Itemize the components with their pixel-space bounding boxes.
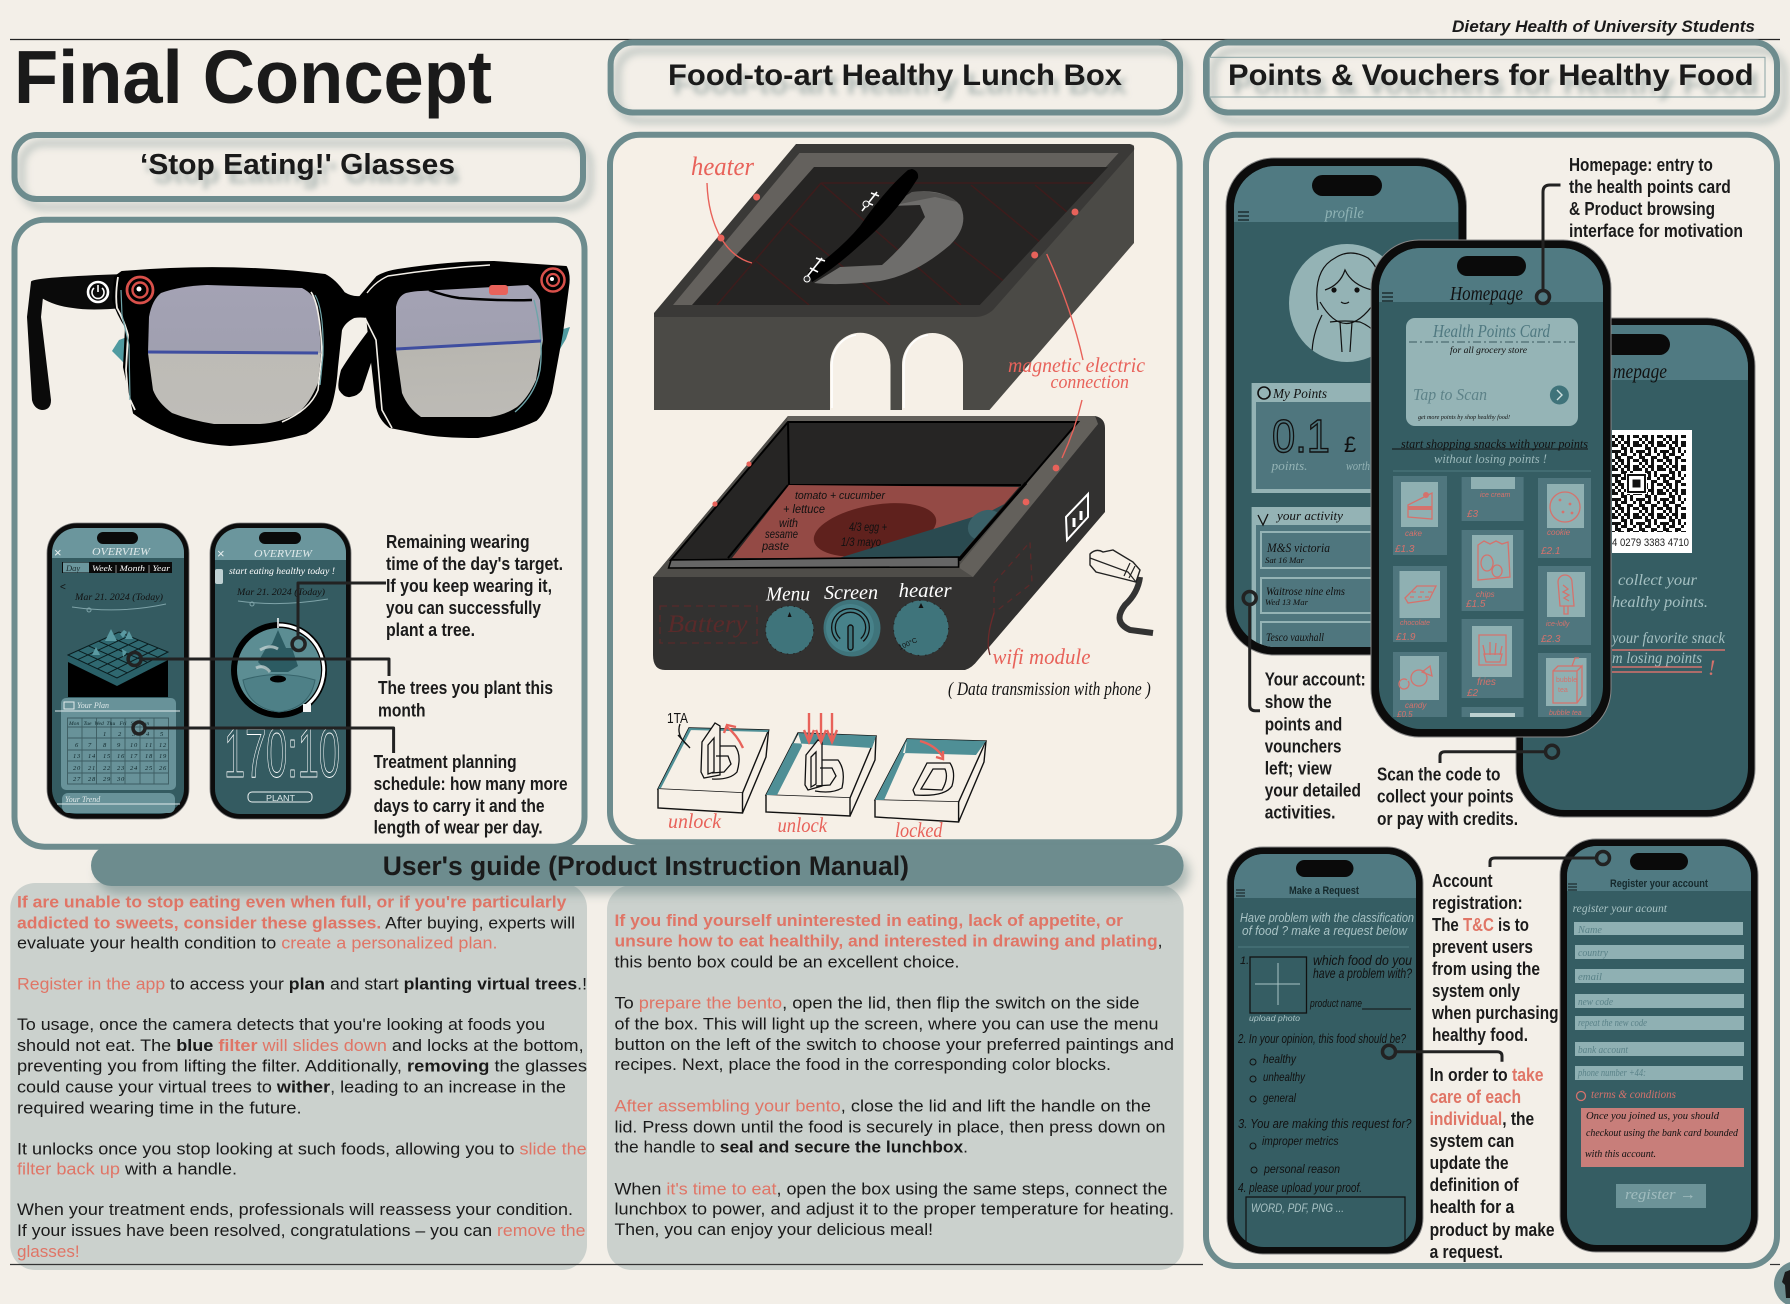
- calendar: your plan: 27282930: [73, 776, 125, 783]
- panel: my points: points.: [1270, 458, 1308, 473]
- panel: guide for glasses: addicted to sweets, consider these glasses. After buying, experts will: [17, 913, 575, 932]
- callout: make a request: system can: [1430, 1131, 1514, 1151]
- panel: guide for lunch box: If you find yourself uninterested in eating, lack of appetite, or: [614, 911, 1123, 930]
- handwritten recipe notes: with: [779, 516, 798, 530]
- phone: QR code scan: !: [1708, 655, 1715, 680]
- phone: register account: terms & conditions: [1591, 1087, 1676, 1101]
- phone: profile: [1226, 158, 1466, 655]
- callout: scan code: or pay with credits.: [1377, 809, 1518, 829]
- illustration: smart glasses: [28, 262, 570, 445]
- phone: make a request: which food do you: [1313, 952, 1412, 968]
- callout: account registration: The T&C is to: [1432, 915, 1529, 935]
- callout: treatment schedule: [133, 722, 568, 838]
- callout: scan code: Scan the code to: [1377, 765, 1500, 785]
- chart: wearing time progress ring: [234, 618, 324, 715]
- callout: treatment schedule: Treatment planning: [374, 752, 517, 772]
- QR code: 4 0279 3383 4710: [1612, 537, 1689, 549]
- panel: guide for glasses: If your issues have been resolved, congratulations – you can remove the: [17, 1221, 586, 1240]
- panel: guide for glasses: could cause your virtual trees to wither, leading to an increase in the: [17, 1077, 566, 1096]
- callout: your account: activities.: [1265, 803, 1336, 823]
- label: heater: [691, 152, 755, 263]
- knob: menu: [765, 584, 814, 654]
- panel: your activity: your activity: [1275, 508, 1343, 523]
- phone: make a request: [1227, 847, 1423, 1254]
- callout: trees planted: The trees you plant this: [378, 678, 553, 698]
- panel: guide for glasses: Register in the app to access your plan and start planting virtual trees .!: [17, 974, 587, 993]
- timer digits: 170:10: [224, 714, 340, 792]
- knob: heater: heater: [899, 580, 952, 602]
- callout: treatment schedule: schedule: how many more: [374, 774, 568, 794]
- panel: guide for lunch box: [607, 885, 1184, 1270]
- phone: make a request: WORD, PDF, PNG ...: [1251, 1201, 1344, 1215]
- phone: QR code scan: mepage: [1613, 361, 1667, 383]
- knob: screen power switch: Screen: [824, 582, 878, 604]
- calendar: your plan: Your Plan: [77, 701, 109, 710]
- form fields: Name: [1577, 925, 1603, 936]
- label: magnetic electric connection: [1008, 254, 1146, 458]
- panel: points and vouchers: [1206, 135, 1777, 1266]
- callout: account registration: Account: [1432, 871, 1493, 891]
- avatar: [1289, 244, 1382, 362]
- card: health points: get more points by shop healthy food!: [1418, 414, 1510, 421]
- form fields: country: [1578, 948, 1609, 959]
- phone: make a request: have a problem with?: [1313, 965, 1412, 981]
- callout: remaining time: [292, 532, 563, 650]
- panel: your activity: Tesco vauxhall: [1266, 630, 1325, 644]
- callout: make a request: product by make: [1430, 1220, 1555, 1240]
- panel: glasses: [14, 220, 584, 847]
- panel: guide for glasses: If are unable to stop eating even when full, or if you're particularly: [17, 893, 567, 912]
- heading: Stop Eating glasses: ‘Stop Eating!' Glasses: [140, 149, 455, 181]
- callout: treatment schedule: length of wear per day.: [374, 818, 543, 838]
- label: magnetic electric connection: magnetic electric: [1008, 353, 1146, 377]
- panel: guide for lunch box: lid. Press down until the food is securely in place, then press down on: [614, 1117, 1166, 1136]
- band: user's guide heading: User's guide (Product Instruction Manual): [383, 851, 909, 881]
- phone: register account: [1560, 839, 1758, 1252]
- running header: project topic: Dietary Health of University Students: [1452, 17, 1755, 36]
- callout: make a request: a request.: [1430, 1242, 1503, 1262]
- heading: Stop Eating glasses: [14, 135, 583, 199]
- product grid: [1393, 476, 1591, 719]
- diagram: lock step 3: locked: [895, 818, 943, 842]
- form fields: [1574, 922, 1744, 1080]
- callout: homepage: & Product browsing: [1569, 199, 1715, 219]
- product grid: £3: [1466, 509, 1479, 520]
- panel: guide for glasses: To usage, once the camera detects that you're looking at foods you: [17, 1015, 545, 1034]
- handwritten recipe notes: [761, 490, 887, 553]
- icon: lid handle: [804, 169, 918, 282]
- phone: homepage: without losing points !: [1434, 452, 1547, 466]
- callout: trees planted: [128, 652, 553, 720]
- card: health points: Tap to Scan: [1413, 385, 1487, 404]
- callout: account registration: prevent users: [1432, 937, 1533, 957]
- callout: make a request: [1382, 1045, 1555, 1262]
- terms notice: checkout using the bank card bounded: [1586, 1127, 1738, 1139]
- phone: tree timer: ×: [217, 546, 225, 561]
- handwritten recipe notes: 1/3 mayo: [841, 535, 881, 549]
- phone: profile: profile: [1324, 205, 1364, 222]
- module: wifi outline: [994, 542, 1032, 613]
- callout: homepage: interface for motivation: [1569, 221, 1743, 241]
- phone: garden overview: OVERVIEW: [92, 546, 151, 558]
- panel: guide for glasses: required wearing time in the future.: [17, 1098, 302, 1117]
- panel: guide for lunch box: this bento box could be an excellent choice.: [614, 952, 960, 971]
- panel: guide for glasses: When your treatment ends, professionals will reassess your condition.: [17, 1200, 573, 1219]
- phone: register account: register your acount: [1573, 901, 1668, 915]
- icon: power socket: [1066, 494, 1088, 540]
- product grid: bubble tea: [1549, 710, 1582, 717]
- phone: homepage: start shopping snacks with your points: [1401, 436, 1588, 451]
- panel: guide for lunch box: After assembling your bento , close the lid and lift the handle on the: [614, 1097, 1151, 1116]
- form fields: bank account: [1578, 1045, 1628, 1056]
- diagram: lock step 1: 1TA: [667, 710, 688, 727]
- phone: tree timer: [210, 523, 351, 819]
- phone: garden overview: Week | Month | Year: [92, 563, 171, 573]
- button: plant: [248, 792, 312, 803]
- phone: make a request: 4. please upload your proof.: [1238, 1181, 1362, 1195]
- phone: make a request: Have problem with the classification: [1240, 910, 1414, 925]
- phone: make a request: Make a Request: [1289, 885, 1359, 897]
- product grid: £2.1: [1540, 546, 1560, 557]
- calendar: your plan: Mon Tue Wed Thu Fri Sat Sun: [68, 721, 149, 727]
- terms notice: Once you joined us, you should: [1586, 1110, 1719, 1122]
- product grid: cookie: [1547, 528, 1571, 537]
- callout: make a request: care of each: [1430, 1087, 1521, 1107]
- callout: your account: points and: [1265, 715, 1342, 735]
- knob: menu: Menu: [765, 584, 810, 606]
- icon: left camera: [127, 277, 153, 303]
- product grid: £1.9: [1395, 632, 1416, 643]
- icon: page badge, bottom right: [1774, 1261, 1790, 1304]
- form fields: phone number +44:: [1577, 1068, 1646, 1079]
- product grid: ice cream: [1480, 492, 1511, 499]
- diagram: lock step 2: unlock: [778, 813, 828, 837]
- callout: homepage: [1536, 155, 1743, 304]
- callout: remaining time: plant a tree.: [386, 620, 475, 640]
- calendar: your plan: [55, 698, 180, 790]
- panel: lunch box: [610, 135, 1180, 842]
- icon: fries: [1479, 635, 1506, 665]
- panel: your activity: Wed 13 Mar: [1265, 598, 1309, 607]
- handwritten recipe notes: paste: [761, 539, 789, 553]
- panel: guide for glasses: evaluate your health condition to create a personalized plan.: [17, 933, 498, 952]
- product grid: ice-lolly: [1546, 621, 1570, 628]
- heading: lunch box: Food-to-art Healthy Lunch Box: [668, 59, 1122, 92]
- callout: treatment schedule: days to carry it and the: [374, 796, 545, 816]
- calendar: your plan: 13141516171819: [73, 753, 167, 760]
- panel: your activity: Sat 16 Mar: [1265, 556, 1305, 565]
- callout: remaining time: you can successfully: [386, 598, 541, 618]
- callout: make a request: individual, the: [1430, 1109, 1534, 1129]
- icon: chocolate: [1405, 586, 1436, 603]
- callout: account registration: registration:: [1432, 893, 1523, 913]
- panel: guide for lunch box: Then, you can enjoy your delicious meal!: [614, 1220, 933, 1239]
- panel: guide for glasses: It unlocks once you stop looking at such foods, allowing you to slide the: [17, 1139, 587, 1158]
- icon: power plug: [1090, 550, 1153, 633]
- calendar: your plan: 20212223242526: [73, 765, 167, 772]
- phone: make a request: upload photo: [1249, 1013, 1300, 1023]
- phone: make a request: healthy: [1263, 1052, 1297, 1066]
- callout: your account: [1243, 592, 1366, 823]
- panel: guide for glasses: filter back up with a handle.: [17, 1159, 237, 1178]
- icon: cake: [1408, 492, 1432, 519]
- phone: QR code scan: m losing points: [1612, 650, 1702, 667]
- callout: make a request: In order to take: [1430, 1065, 1544, 1085]
- callout: homepage: Homepage: entry to: [1569, 155, 1713, 175]
- heading: points and vouchers: [1206, 42, 1777, 112]
- phone: make a request: 1.: [1240, 955, 1249, 967]
- product grid: £2.3: [1540, 634, 1561, 645]
- handwritten recipe notes: tomato + cucumber: [795, 490, 886, 502]
- callout: remaining time: If you keep wearing it,: [386, 576, 552, 596]
- phone: make a request: 2. In your opinion, this food should be?: [1237, 1032, 1406, 1046]
- panel: my points: £: [1344, 432, 1356, 457]
- phone: QR code scan: collect your: [1618, 572, 1698, 589]
- phone: tree timer: Mar 21. 2024 (Today): [236, 587, 325, 598]
- callout: homepage: the health points card: [1569, 177, 1731, 197]
- callout: your account: show the: [1265, 692, 1332, 712]
- panel: your activity: Waitrose nine elms: [1266, 584, 1345, 598]
- band: user's guide heading: [91, 845, 1184, 886]
- phone: make a request: product name: [1309, 998, 1362, 1010]
- product grid: chips: [1476, 590, 1495, 599]
- illustration: lunch box base: [653, 416, 1105, 670]
- callout: account registration: healthy food.: [1432, 1025, 1528, 1045]
- phone: homepage: Homepage: [1449, 283, 1523, 305]
- callout: trees planted: month: [378, 700, 426, 720]
- icon: cookie: [1550, 492, 1580, 522]
- knob: screen power switch: [824, 582, 880, 656]
- form fields: repeat the new code: [1578, 1018, 1647, 1029]
- callout: scan code: [1377, 745, 1558, 829]
- phone: make a request: 3. You are making this request for?: [1238, 1116, 1412, 1131]
- panel: your trend: [57, 793, 180, 813]
- icon: bubble tea: [1553, 658, 1582, 703]
- phone: garden overview: ×: [54, 545, 62, 560]
- phone: make a request: personal reason: [1263, 1162, 1340, 1176]
- panel: my points: worth: [1346, 458, 1370, 473]
- panel: your activity: [1252, 507, 1370, 647]
- phone: QR code scan: [1516, 318, 1755, 817]
- knob: heater: [894, 580, 952, 656]
- label: heater: heater: [691, 152, 755, 181]
- knob: heater: 100°C: [897, 636, 919, 652]
- module: battery: Battery: [668, 611, 748, 638]
- callout: your account: left; view: [1265, 759, 1333, 779]
- phone: garden overview: Mar 21. 2024 (Today): [74, 592, 163, 603]
- label: wifi module: ( Data transmission with phone ): [948, 679, 1151, 700]
- diagram: lock step 1: [658, 710, 769, 833]
- panel: my points: [1252, 383, 1432, 493]
- icon: right camera: [542, 268, 564, 292]
- heading: points and vouchers: Points & Vouchers for Healthy Food: [1228, 59, 1754, 92]
- button: plant: PLANT: [266, 793, 295, 803]
- phone: make a request: unhealthy: [1263, 1070, 1306, 1084]
- form fields: email: [1578, 972, 1602, 983]
- callout: remaining time: time of the day's target.: [386, 554, 563, 574]
- card: health points: [1406, 318, 1578, 426]
- chart: isometric tree garden: [68, 629, 168, 697]
- icon: candy: [1399, 666, 1432, 689]
- phone: tree timer: OVERVIEW: [254, 548, 313, 560]
- panel: my points: My Points: [1272, 387, 1328, 402]
- label: wifi module: [948, 613, 1151, 700]
- panel: guide for lunch box: lunchbox to power, and adjust it to the proper temperature for heating.: [614, 1199, 1174, 1218]
- diagram: lock step 1: unlock: [668, 809, 722, 833]
- QR code: [1612, 430, 1692, 553]
- handwritten recipe notes: + lettuce: [783, 502, 825, 516]
- panel: guide for lunch box: button on the left of the switch to choose your preferred paintings and: [614, 1035, 1174, 1054]
- icon: bubble tea: tea: [1558, 687, 1568, 694]
- phone: register account: Register your account: [1610, 878, 1708, 890]
- phone: garden overview: Day: [65, 563, 80, 573]
- callout: account registration: [1431, 852, 1610, 1045]
- product grid: £1.3: [1394, 544, 1415, 555]
- panel: guide for lunch box: of the box. This will light up the screen, where you can use the menu: [614, 1014, 1158, 1033]
- module: battery: [660, 606, 757, 643]
- callout: your account: Your account:: [1265, 670, 1366, 690]
- callout: account registration: when purchasing: [1431, 1003, 1558, 1023]
- label: wifi module: wifi module: [992, 644, 1091, 669]
- callout: your account: vounchers: [1265, 737, 1342, 757]
- phone: garden overview: [47, 523, 189, 819]
- calendar: your plan: 6789101112: [75, 742, 167, 749]
- callout: scan code: collect your points: [1377, 787, 1514, 807]
- panel: your activity: M&S victoria: [1266, 540, 1330, 555]
- phone: make a request: of food ? make a request below: [1242, 923, 1408, 938]
- panel: guide for glasses: should not eat. The blue filter will slides down and locks at the bottom,: [17, 1036, 584, 1055]
- phone: QR code scan: your favorite snack: [1610, 630, 1726, 647]
- phone: make a request: general: [1263, 1091, 1296, 1105]
- product grid: £2: [1466, 688, 1479, 699]
- terms notice: [1581, 1108, 1744, 1167]
- handwritten recipe notes: 4/3 egg +: [849, 520, 887, 534]
- callout: account registration: from using the: [1432, 959, 1540, 979]
- callout: account registration: system only: [1432, 981, 1520, 1001]
- panel: guide for glasses: preventing you from lifting the filter. Additionally, removing the glasses: [17, 1057, 587, 1076]
- panel: guide for lunch box: To prepare the bento , open the lid, then flip the switch on the side: [614, 993, 1140, 1012]
- callout: remaining time: Remaining wearing: [386, 532, 530, 552]
- panel: guide for lunch box: the handle to seal and secure the lunchbox .: [614, 1137, 968, 1156]
- icon: power button: [88, 282, 108, 302]
- diagram: lock step 2: [766, 713, 876, 837]
- panel: guide for lunch box: unsure how to eat healthily, and interested in drawing and plating ,: [614, 932, 1162, 951]
- icon: chips: [1478, 541, 1510, 580]
- panel: my points: 0.1: [1272, 410, 1330, 462]
- product grid: fries: [1477, 677, 1496, 688]
- button: register: register →: [1625, 1187, 1696, 1203]
- label: magnetic electric connection: connection: [1050, 372, 1129, 393]
- illustration: lunch box lid: [654, 144, 1134, 410]
- panel: guide for glasses: [10, 883, 587, 1270]
- handwritten recipe notes: sesame: [765, 527, 798, 541]
- panel: guide for glasses: glasses!: [17, 1242, 80, 1261]
- product grid: chocolate: [1400, 620, 1430, 627]
- product grid: £0.5: [1396, 710, 1413, 719]
- phone: tree timer: start eating healthy today !: [229, 567, 335, 577]
- callout: make a request: update the: [1430, 1153, 1509, 1173]
- phone: make a request: improper metrics: [1262, 1134, 1338, 1148]
- card: health points: Health Points Card: [1432, 321, 1551, 341]
- product grid: £1.5: [1465, 599, 1486, 610]
- diagram: lock step 3: [875, 739, 986, 842]
- heading: lunch box: [611, 42, 1180, 112]
- callout: make a request: health for a: [1430, 1197, 1515, 1217]
- callout: make a request: definition of: [1430, 1175, 1519, 1195]
- card: health points: for all grocery store: [1450, 345, 1527, 355]
- phone: garden overview: <: [60, 582, 66, 593]
- product grid: cake: [1405, 529, 1422, 538]
- calendar: your plan: 12345: [103, 731, 164, 738]
- callout: your account: your detailed: [1265, 781, 1361, 801]
- panel: your trend: Your Trend: [65, 795, 101, 804]
- panel: guide for lunch box: When it's time to eat , open the box using the same steps, connect the: [614, 1179, 1168, 1198]
- form fields: new code: [1578, 997, 1614, 1008]
- terms notice: with this account.: [1585, 1148, 1656, 1160]
- icon: ice lolly: [1558, 575, 1574, 614]
- phone: homepage: [1371, 240, 1611, 737]
- phone: QR code scan: healthy points.: [1612, 594, 1708, 611]
- panel: guide for lunch box: recipes. Next, place the food in the corresponding color blocks.: [614, 1055, 1111, 1074]
- product grid: candy: [1405, 701, 1427, 710]
- button: register: [1616, 1184, 1706, 1208]
- icon: bubble tea: bubble: [1556, 677, 1577, 684]
- page title: Final Concept: [14, 35, 492, 119]
